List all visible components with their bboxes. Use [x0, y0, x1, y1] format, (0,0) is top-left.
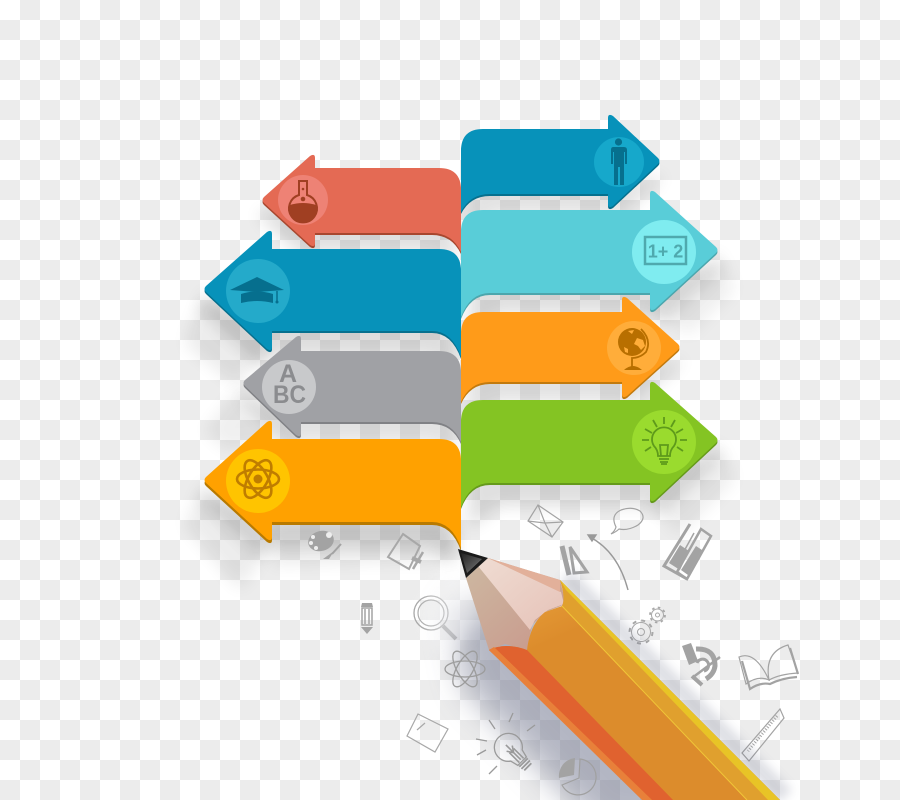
icon: outlined lightbulb — [476, 713, 538, 777]
icon: magnifier — [414, 596, 456, 639]
icon: flask — [278, 175, 328, 225]
icon: small pencil — [361, 603, 373, 634]
arrow: cyan math board — [461, 191, 718, 319]
pencil shadow — [420, 549, 792, 800]
icon: tablet — [388, 534, 423, 569]
arrow: red flask — [262, 155, 461, 254]
icon: palette — [306, 528, 341, 559]
arrow: gray ABC — [244, 336, 461, 444]
arrow: orange atom — [204, 421, 461, 551]
icon: curved arrow — [588, 535, 628, 590]
arrow: green lightbulb — [461, 382, 718, 509]
icon: set square and ruler — [562, 546, 587, 575]
icon: ABC: A — [279, 360, 297, 388]
icon: ABC — [262, 360, 316, 414]
icon: speech bubble — [611, 508, 643, 534]
icon: 1+2 board: 1+ 2 — [648, 242, 683, 262]
arrow shadows — [185, 175, 735, 590]
icon: globe — [607, 321, 661, 375]
icon: ABC: BC — [273, 381, 306, 409]
pencil body — [489, 580, 780, 800]
icon: envelope — [528, 505, 563, 537]
icon: bar chart device — [664, 524, 711, 579]
icon: pie chart — [559, 758, 596, 795]
icon: ruler — [742, 709, 784, 761]
icon: open book — [739, 645, 798, 689]
icon: lightbulb — [632, 410, 696, 474]
pencil wood tip — [466, 558, 566, 650]
icon: graduation cap — [226, 259, 290, 323]
arrow: blue person — [461, 115, 660, 214]
icon: outlined atom — [445, 648, 485, 690]
icon: note card — [407, 714, 448, 752]
icon: person — [594, 137, 644, 187]
arrow: blue graduation cap — [204, 231, 461, 359]
pencil graphite — [458, 549, 488, 578]
icon: gears — [630, 608, 665, 644]
icon: atom — [226, 449, 290, 513]
icon: microscope — [682, 643, 720, 685]
arrow: orange globe — [461, 297, 680, 404]
pencil — [458, 549, 780, 800]
icon: 1+2 board — [632, 220, 696, 284]
